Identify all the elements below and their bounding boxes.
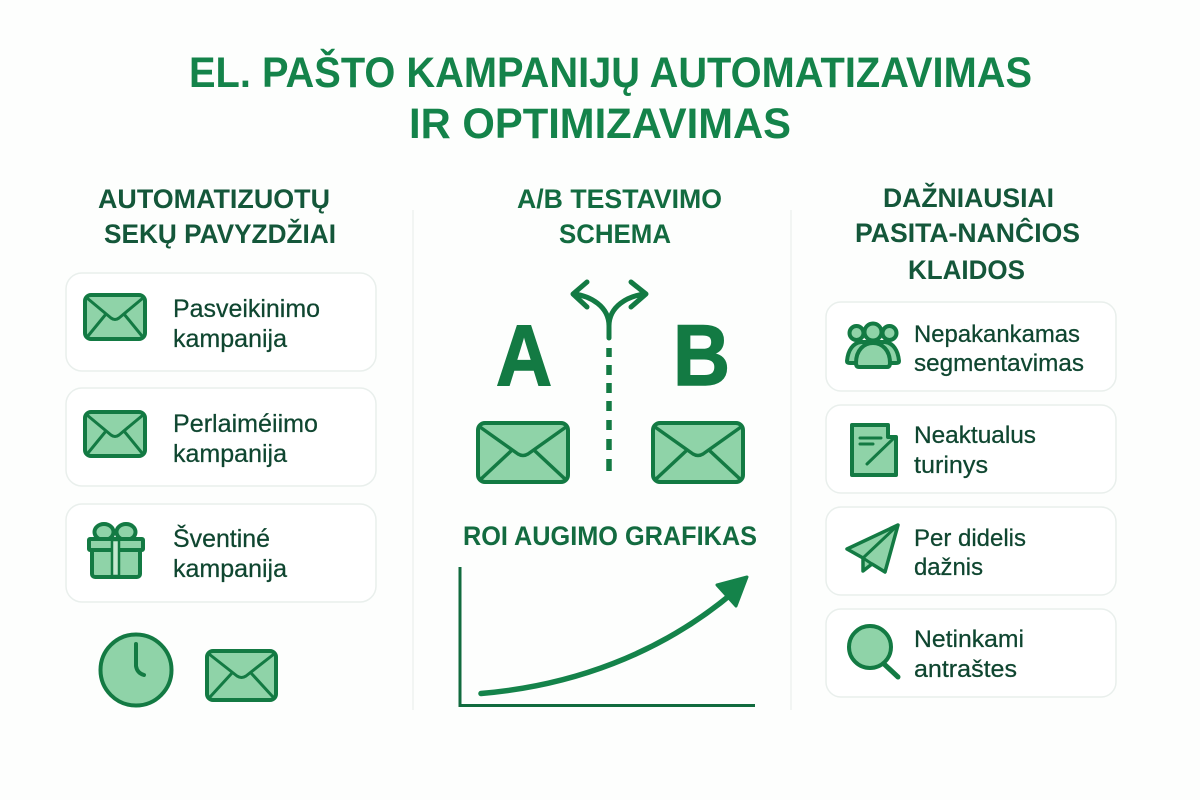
icon: envelope small: [207, 651, 276, 700]
label: too high frequency: dažnis: [914, 554, 983, 581]
label: poor subject lines: antraštes: [914, 656, 1017, 683]
card: poor subject lines: [826, 609, 1116, 697]
card: holiday campaign: [66, 504, 376, 602]
label: holiday campaign: Šventiné: [173, 524, 270, 553]
heading: common mistakes: [855, 182, 1080, 285]
letter B: B: [673, 308, 730, 404]
label: win-back campaign: kampanija: [173, 440, 287, 468]
letter A: A: [496, 308, 552, 404]
heading: common mistakes: KLAIDOS: [908, 255, 1025, 285]
icon: clock: [100, 634, 172, 706]
panel: automated sequences: [66, 184, 376, 706]
heading: A/B testing: [517, 184, 722, 249]
card: irrelevant content: [826, 405, 1116, 493]
card: win-back campaign: [66, 388, 376, 486]
label: welcome campaign: kampanija: [173, 325, 287, 353]
card: poor segmentation: [826, 302, 1116, 391]
label: irrelevant content: Neaktualus: [914, 422, 1036, 449]
panel: common mistakes: [826, 182, 1116, 697]
label: welcome campaign: Pasveikinimo: [173, 295, 320, 323]
icon: magnifier: [849, 626, 898, 677]
icon: envelope: [85, 412, 145, 456]
title: EL. PAŠTO KAMPANIJŲ AUTOMATIZAVIMAS: [189, 48, 1032, 97]
icon: gift: [89, 524, 143, 577]
heading: automated sequences: AUTOMATIZUOTŲ: [98, 184, 330, 214]
label: irrelevant content: turinys: [914, 452, 988, 479]
card: too high frequency: [826, 507, 1116, 595]
icon: envelope: [85, 295, 145, 339]
heading: common mistakes: DAŽNIAUSIAI: [883, 182, 1054, 213]
icon: envelope A: [478, 423, 568, 482]
icon: paper plane: [847, 525, 898, 572]
heading: A/B testing: SCHEMA: [559, 219, 671, 249]
panel: A/B testing: [460, 184, 757, 706]
heading: common mistakes: PASITA-NANĈIOS: [855, 217, 1080, 248]
label: poor segmentation: segmentavimas: [914, 350, 1084, 377]
chart: ROI growth: [460, 567, 755, 706]
title: [189, 48, 1032, 148]
title: IR OPTIMIZAVIMAS: [409, 101, 791, 148]
label: win-back campaign: Perlaiméiimo: [173, 410, 318, 438]
label: poor subject lines: Netinkami: [914, 626, 1024, 653]
heading: automated sequences: SEKŲ PAVYZDŽIAI: [104, 218, 336, 249]
icon: people: [847, 324, 899, 367]
card: welcome campaign: [66, 273, 376, 371]
heading: A/B testing: A/B TESTAVIMO: [517, 184, 722, 214]
label: poor segmentation: Nepakankamas: [914, 321, 1080, 348]
heading: ROI growth chart: ROI AUGIMO GRAFIKAS: [463, 521, 757, 551]
label: too high frequency: Per didelis: [914, 525, 1026, 552]
icon: envelope B: [653, 423, 743, 482]
icon: branching arrow: [573, 282, 646, 471]
label: holiday campaign: kampanija: [173, 555, 287, 583]
icon: document: [852, 425, 896, 475]
heading: automated sequences: [98, 184, 336, 249]
